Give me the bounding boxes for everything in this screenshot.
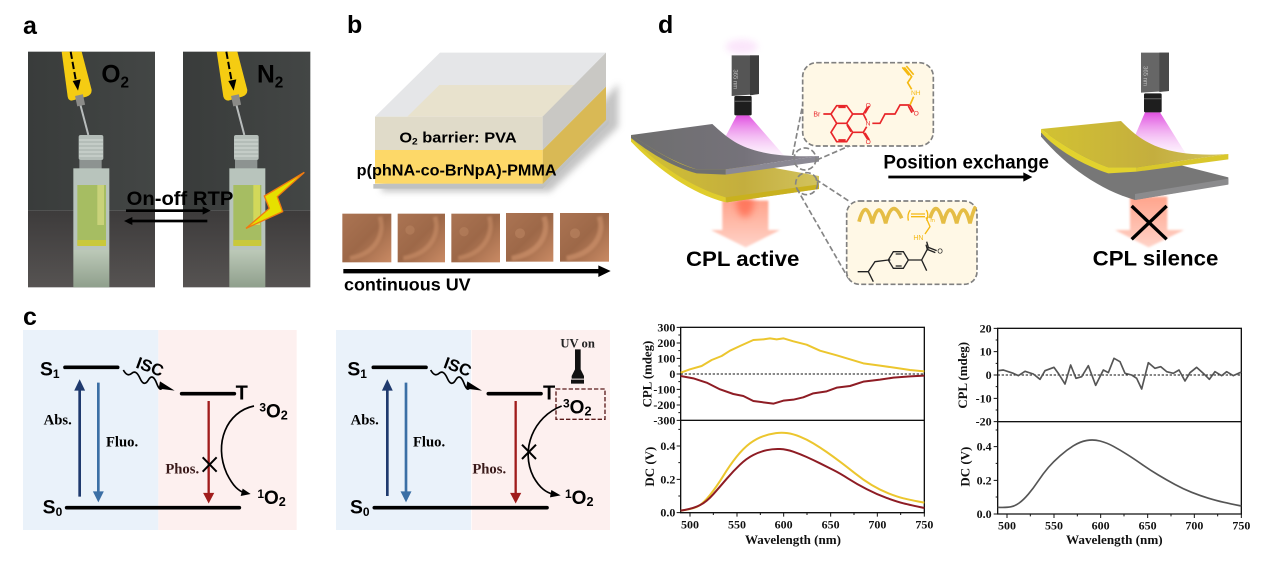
panel a: oxygen and nitrogen cuvette photos (28, 52, 310, 287)
dashed box: triplet oxygen highlight (556, 389, 605, 419)
axis labels and tick values: 0.4 (977, 440, 992, 454)
callout: naphthalimide monomer (803, 63, 933, 146)
icon: UV lamp: 365 nm (732, 69, 738, 89)
zoom connectors (793, 102, 852, 278)
axis labels and tick values: 700 (868, 518, 886, 532)
energy levels (373, 367, 547, 508)
panel d left: CPL active stack and molecules (631, 39, 1049, 284)
axis labels and tick values: -300 (653, 413, 675, 427)
labels: transitions (351, 412, 506, 477)
labels: transitions: Fluo. (413, 435, 446, 451)
axis labels and tick values (956, 321, 1250, 547)
label: singlet oxygen: O (264, 488, 279, 509)
callout: naphthalimide monomer: O (866, 139, 871, 146)
label: triplet oxygen: 2 (281, 408, 288, 422)
callout: polymer unit: HN (913, 235, 923, 242)
level labels: S (43, 497, 56, 518)
cross: energy transfer blocked (522, 445, 536, 459)
axis labels and tick values: 0.2 (660, 472, 675, 486)
DC trace: red (681, 449, 924, 511)
arrow: energy transfer to oxygen (221, 406, 254, 496)
axis labels and tick values: 0 (986, 368, 992, 382)
DC axes and ticks (994, 422, 1241, 518)
labels: transitions: Phos. (165, 461, 199, 477)
label: O2: 2 (121, 74, 129, 91)
cross: no CPL (1132, 206, 1167, 239)
axis labels and tick values: 0.2 (977, 473, 992, 487)
label: O2 barrier PVA: barrier: PVA (418, 129, 517, 146)
panel b: bilayer film and UV image series (342, 53, 618, 295)
UV beam (715, 39, 785, 185)
axis labels and tick values: DC (V) (958, 447, 972, 487)
yellow film (631, 135, 819, 202)
axis labels and tick values: 550 (1045, 518, 1063, 532)
callout: naphthalimide monomer: Br (813, 112, 821, 119)
axis labels and tick values: 0.0 (660, 506, 675, 520)
panel label d: d (658, 11, 673, 39)
axis labels and tick values: 500 (998, 518, 1016, 532)
callout: naphthalimide monomer: O (866, 102, 871, 109)
label: singlet oxygen: 2 (586, 495, 593, 509)
label: triplet oxygen: O (266, 401, 281, 422)
axis labels and tick values: 0.4 (660, 439, 675, 453)
axis labels and tick values: 200 (657, 336, 675, 350)
photo: cuvette under N2 (183, 52, 310, 287)
label: ISC: ISC (134, 353, 166, 381)
label: ISC: ISC (441, 353, 474, 381)
labels: transitions (44, 412, 199, 477)
axis labels and tick values: 0.0 (977, 507, 992, 521)
chart: CPL and DC spectra, bilayer after exchange (956, 321, 1250, 547)
axis labels and tick values: 10 (980, 345, 992, 359)
label: O2 barrier PVA: 2 (412, 137, 418, 147)
CPL trace: noise around zero (998, 358, 1241, 389)
arrow: position exchange (888, 172, 1032, 182)
downward CPL glow arrow (1115, 197, 1184, 247)
label: On-off RTP: On-off RTP (127, 189, 233, 210)
level labels: 1 (360, 367, 367, 381)
level labels: 1 (53, 367, 60, 381)
axis labels and tick values: -100 (653, 382, 675, 396)
illustration: PVA and copolymer bilayer block (373, 53, 618, 192)
label: CPL silence: CPL silence (1093, 246, 1218, 271)
axis labels and tick values: 550 (728, 518, 746, 532)
DC trace (998, 440, 1241, 507)
level labels: S (347, 359, 360, 380)
panel label c: c (23, 303, 37, 331)
panel c right: Jablonski diagram under UV (336, 330, 610, 530)
level labels: S (40, 359, 53, 380)
axis labels and tick values: 650 (822, 518, 840, 532)
axis labels and tick values: 650 (1139, 518, 1157, 532)
label: singlet oxygen: 1 (565, 487, 572, 501)
label: singlet oxygen: 1 (257, 487, 264, 501)
axis labels and tick values: -20 (976, 415, 992, 429)
axis labels and tick values: DC (V) (643, 447, 657, 487)
photo: cuvette under O2 (28, 52, 155, 287)
axis labels and tick values (640, 320, 933, 547)
DC trace: yellow (681, 433, 924, 511)
callout: naphthalimide monomer: N (866, 121, 871, 128)
label: N2: N (257, 62, 275, 89)
labels: transitions: Abs. (44, 412, 72, 428)
level labels: T (236, 383, 248, 405)
axis labels and tick values: CPL (mdeg) (640, 341, 654, 407)
CPL axes and ticks (994, 328, 1241, 422)
chart: CPL and DC spectra, two films (640, 320, 933, 547)
label: UV on: UV on (560, 336, 595, 350)
arrow: phosphorescence (512, 401, 519, 501)
axis labels and tick values: 600 (775, 518, 793, 532)
label: Position exchange: Position exchange (883, 152, 1049, 173)
level labels (347, 359, 555, 519)
icon: flashlight (571, 349, 584, 384)
callout: polymer unit: m (930, 218, 935, 224)
axis labels and tick values: 750 (1232, 518, 1250, 532)
CPL trace: yellow (681, 338, 924, 373)
label: triplet oxygen: 3 (563, 396, 570, 410)
label: triplet oxygen: O (570, 397, 584, 418)
CPL trace: red (681, 376, 924, 404)
icon: lightning bolt (246, 172, 304, 228)
background: singlet region (336, 330, 471, 530)
label: triplet oxygen: 3 (259, 400, 266, 414)
label: triplet oxygen: 2 (584, 404, 591, 418)
icon: UV lamp: 365 nm (1141, 66, 1147, 86)
callout: polymer unit (847, 201, 977, 284)
axis labels and tick values: 100 (657, 351, 675, 365)
label: O2 barrier PVA: O (399, 129, 411, 146)
icon: UV lamp (732, 55, 759, 115)
panel d right: CPL silent stack (1041, 53, 1228, 271)
arrow: continuous UV (343, 265, 611, 277)
axis labels and tick values: Wavelength (nm) (1066, 533, 1163, 547)
DC axes and ticks (677, 420, 924, 517)
arrow: blocked energy transfer (528, 406, 562, 497)
arrow: intersystem crossing (431, 370, 482, 391)
background: triplet region (472, 330, 610, 530)
callout: naphthalimide monomer: NH (911, 90, 921, 97)
panel label a: a (23, 12, 38, 40)
energy levels (65, 367, 239, 508)
panel c left: Jablonski diagram, phosphorescence quenched (23, 330, 297, 530)
level labels: T (543, 383, 555, 405)
axis labels and tick values: Wavelength (nm) (745, 533, 841, 547)
UV beam (1127, 112, 1187, 187)
label: O2: O (101, 62, 121, 89)
axis labels and tick values: -200 (653, 398, 675, 412)
background: singlet region (23, 330, 158, 530)
axis labels and tick values: 700 (1185, 518, 1203, 532)
axis labels and tick values: 300 (657, 320, 675, 334)
label: copolymer layer: p(phNA-co-BrNpA)-PMMA (357, 163, 557, 180)
level labels: 0 (363, 505, 370, 519)
grey barrier film (631, 124, 819, 175)
callout: naphthalimide monomer: O (914, 110, 919, 117)
axis labels and tick values: -10 (976, 391, 992, 405)
callout: polymer unit: O (937, 248, 943, 255)
labels: transitions: Phos. (472, 461, 506, 477)
label: singlet oxygen: 2 (279, 495, 286, 509)
cross: phosphorescence blocked (203, 457, 217, 472)
axis labels and tick values: 500 (681, 518, 699, 532)
image series: film under UV (342, 213, 609, 262)
level labels (40, 359, 248, 519)
axis labels and tick values: 0 (669, 367, 675, 381)
CPL axes and ticks (677, 327, 924, 420)
axis labels and tick values: 600 (1092, 518, 1110, 532)
yellow film (1041, 121, 1228, 173)
arrow: absorption (384, 382, 391, 496)
label: CPL active: CPL active (686, 246, 799, 271)
labels: transitions: Abs. (351, 412, 379, 428)
axis labels and tick values: 20 (980, 321, 992, 335)
arrow: fluorescence (403, 383, 409, 499)
arrow: intersystem crossing (123, 370, 175, 391)
axis labels and tick values: CPL (mdeg) (956, 342, 970, 409)
arrow: phosphorescence (205, 401, 212, 501)
level labels: S (350, 497, 363, 518)
arrows: reversible switching (124, 207, 211, 225)
grey film (1041, 133, 1228, 200)
downward CPL glow arrow (711, 189, 780, 247)
axis labels and tick values: 750 (915, 518, 933, 532)
panel label b: b (347, 11, 362, 39)
background: triplet region (158, 330, 297, 530)
arrow: fluorescence (95, 383, 102, 499)
label: singlet oxygen: O (572, 488, 586, 509)
arrow: absorption (76, 382, 83, 497)
icon: UV lamp (1141, 53, 1169, 112)
level labels: 0 (56, 505, 63, 519)
labels: transitions: Fluo. (106, 435, 139, 451)
label: continuous UV: continuous UV (344, 275, 471, 295)
label: N2: 2 (275, 74, 283, 91)
